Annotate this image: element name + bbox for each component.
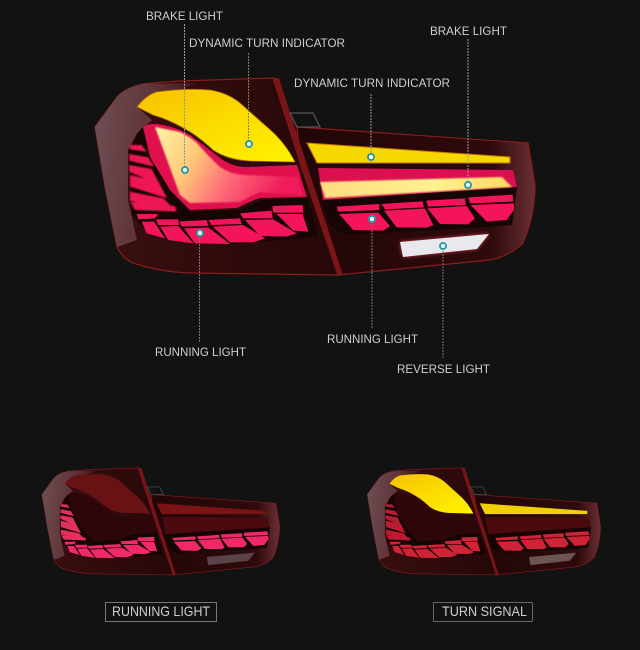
dark brake area left [68, 493, 156, 540]
marker: dynamic turn indicator right [368, 154, 374, 160]
leader line: brake light right [467, 39, 469, 183]
dim brake band right [162, 517, 270, 534]
left brake light envelope [143, 124, 307, 210]
dim dynamic indicator left [65, 474, 150, 514]
right brake band [318, 168, 517, 200]
label: dynamic turn indicator right: DYNAMIC TURN INDICATOR [294, 76, 450, 90]
reverse light off [207, 553, 255, 565]
caption: turn signal: TURN SIGNAL [442, 603, 527, 619]
left fins lit [64, 537, 157, 558]
right fins lit [172, 531, 268, 551]
yellow indicator left [390, 474, 473, 514]
dim indicator right [156, 503, 266, 514]
reverse light glow [400, 234, 489, 257]
leader line: dynamic turn indicator right [370, 94, 372, 155]
label: brake light left: BRAKE LIGHT [146, 9, 224, 23]
dim brake band right [486, 517, 591, 534]
label: running light left: RUNNING LIGHT [155, 345, 247, 359]
marker: dynamic turn indicator left [246, 141, 252, 147]
reverse light [400, 234, 489, 257]
ribs lit [61, 504, 86, 541]
caption: running light: RUNNING LIGHT [112, 603, 210, 619]
right running light fins [337, 195, 514, 231]
left fins red [389, 537, 480, 558]
label: brake light right: BRAKE LIGHT [430, 24, 508, 38]
ribs dim red [386, 504, 411, 541]
right brake bright core [320, 177, 512, 198]
main tail light pair [95, 78, 535, 275]
right fins red [495, 531, 589, 551]
marker: brake light left [182, 167, 188, 173]
marker: reverse light [440, 243, 446, 249]
marker: running light left [197, 230, 203, 236]
leader line: running light middle [371, 221, 373, 329]
label: reverse light: REVERSE LIGHT [397, 362, 491, 376]
label: running light middle: RUNNING LIGHT [327, 332, 419, 346]
marker: running light middle [369, 216, 375, 222]
reverse light off [529, 553, 576, 565]
left ribs [129, 145, 177, 212]
right dynamic turn indicator [307, 143, 510, 163]
dark brake area left [393, 493, 480, 540]
label: dynamic turn indicator left: DYNAMIC TURN INDICATOR [189, 36, 345, 50]
leader line: dynamic turn indicator left [248, 53, 250, 142]
thumbnail: running light state [42, 468, 280, 575]
leader line: running light left [198, 235, 200, 342]
left dynamic turn indicator [137, 89, 295, 162]
leader line: brake light left [184, 24, 186, 168]
left running light fins [137, 205, 308, 244]
left brake light bright core [155, 127, 303, 203]
yellow indicator right [480, 503, 587, 514]
leader line: reverse light [442, 248, 444, 358]
thumbnail: turn signal state [367, 468, 601, 575]
marker: brake light right [465, 182, 471, 188]
